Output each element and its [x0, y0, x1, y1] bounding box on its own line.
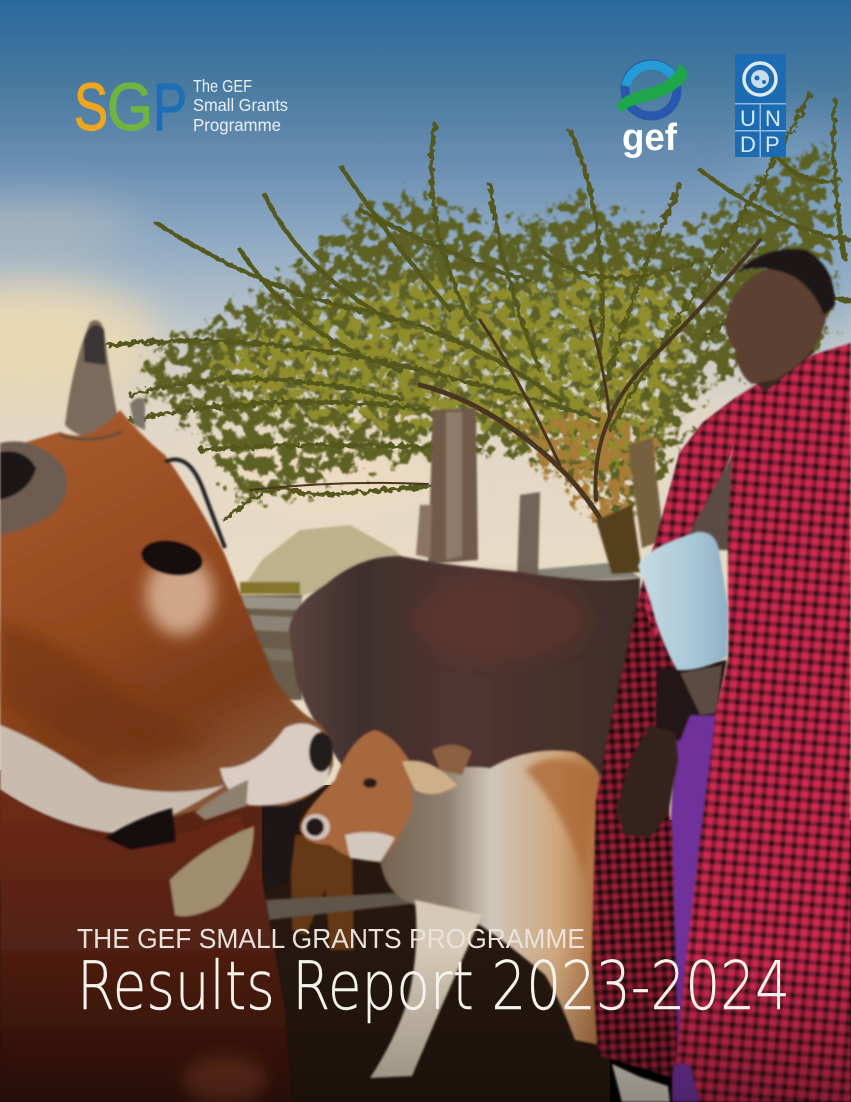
logo: UNDP: U [740, 106, 756, 131]
cow brow patch [146, 555, 214, 635]
SGP letters: S [74, 70, 108, 145]
logo: UNDP: N [765, 106, 781, 131]
background cow legs [290, 835, 354, 950]
calf nose [302, 814, 330, 840]
lower cow [0, 780, 292, 1102]
logo: GEF: gef [622, 117, 677, 159]
background: sky [0, 0, 851, 820]
calf far ear [432, 744, 472, 775]
cow muzzle [220, 723, 330, 805]
cow small horn [130, 398, 145, 430]
tree branches [250, 240, 760, 570]
logo: GEF [616, 64, 687, 159]
logo: UNDP [735, 54, 786, 157]
calf front leg [370, 900, 482, 1078]
calf head [300, 730, 412, 862]
calf hind foot [612, 1064, 670, 1102]
tree foliage amber [480, 390, 680, 550]
jug [638, 532, 728, 670]
big cow [0, 320, 333, 835]
cow horn [65, 320, 118, 436]
woman left robe [592, 397, 737, 1077]
lower cow back fill [0, 770, 262, 880]
woman face [726, 265, 826, 384]
woman [592, 249, 851, 1102]
calf rump colouring [525, 759, 598, 880]
tree trunk [596, 505, 642, 574]
fence rail near ground [265, 892, 410, 920]
SGP tagline: The GEF [193, 76, 252, 96]
tree twigs [108, 95, 851, 520]
SGP tagline: Small Grants [193, 95, 288, 115]
title: programme name: THE GEF SMALL GRANTS PROGRAMME [77, 923, 585, 954]
logo: UNDP: D [740, 132, 756, 157]
distant grass and horizon [240, 525, 640, 596]
calf [300, 730, 602, 1078]
tree [108, 95, 851, 575]
cow eye [139, 536, 205, 580]
cow nose [309, 732, 333, 772]
UN emblem [744, 63, 776, 95]
cow head [0, 410, 333, 835]
logo: SGP [74, 70, 288, 145]
calf eye [363, 778, 377, 788]
logo: UNDP: P [765, 132, 780, 157]
woman hair [737, 249, 835, 315]
woman skirt [670, 705, 724, 1102]
calf ear [402, 761, 457, 794]
background cow [262, 556, 640, 950]
woman arm and hand [616, 725, 678, 838]
woman right cloak [676, 343, 851, 1102]
cow rope [165, 459, 225, 548]
dark collar [105, 808, 176, 850]
fence posts and rails [238, 408, 664, 700]
dark lower overlay [0, 950, 851, 1102]
cow ear [0, 441, 67, 535]
tree foliage highlights [170, 240, 710, 500]
woman torso [688, 450, 735, 550]
calf body [380, 750, 602, 1045]
ground [0, 785, 610, 1102]
SGP tagline: Programme [193, 115, 281, 135]
cow pale jaw [0, 725, 225, 835]
SGP tagline [193, 76, 288, 135]
tree foliage mass [120, 120, 851, 575]
lower cow muzzle shadow [183, 1056, 267, 1102]
SGP letters: G [107, 70, 153, 145]
lower cow horn [170, 826, 254, 916]
woman neck [745, 338, 815, 392]
SGP letters: P [153, 70, 187, 145]
SGP letters [74, 70, 187, 145]
